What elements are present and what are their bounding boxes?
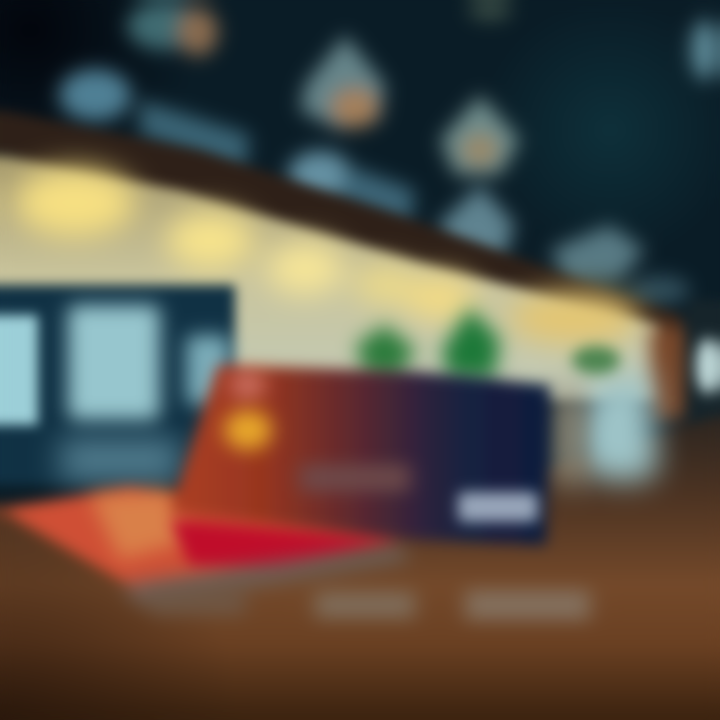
ceiling lights: warm yellow glow <box>15 168 641 344</box>
reflections: pale blocks on table <box>150 590 590 620</box>
card logo: pale block <box>458 492 538 522</box>
red booklet under the card <box>0 487 410 605</box>
windows: dark frames with pale blue panes <box>0 285 235 485</box>
table: wooden surface <box>0 415 720 720</box>
pillar: orange-brown at right <box>650 325 686 420</box>
credit card: red to navy gradient <box>170 365 550 545</box>
plants: green leaves behind card <box>356 308 500 378</box>
ceiling edge: brown band <box>0 110 680 345</box>
right dark area with light spot <box>688 300 720 430</box>
card number strip: muted <box>300 465 410 491</box>
card chip: yellow <box>224 410 272 450</box>
back wall: cream band <box>0 155 660 400</box>
card highlight: pink <box>230 371 266 399</box>
bottle: pale blue with green top <box>552 346 658 485</box>
ceiling fixtures: pale blue and amber lamps <box>59 1 719 304</box>
